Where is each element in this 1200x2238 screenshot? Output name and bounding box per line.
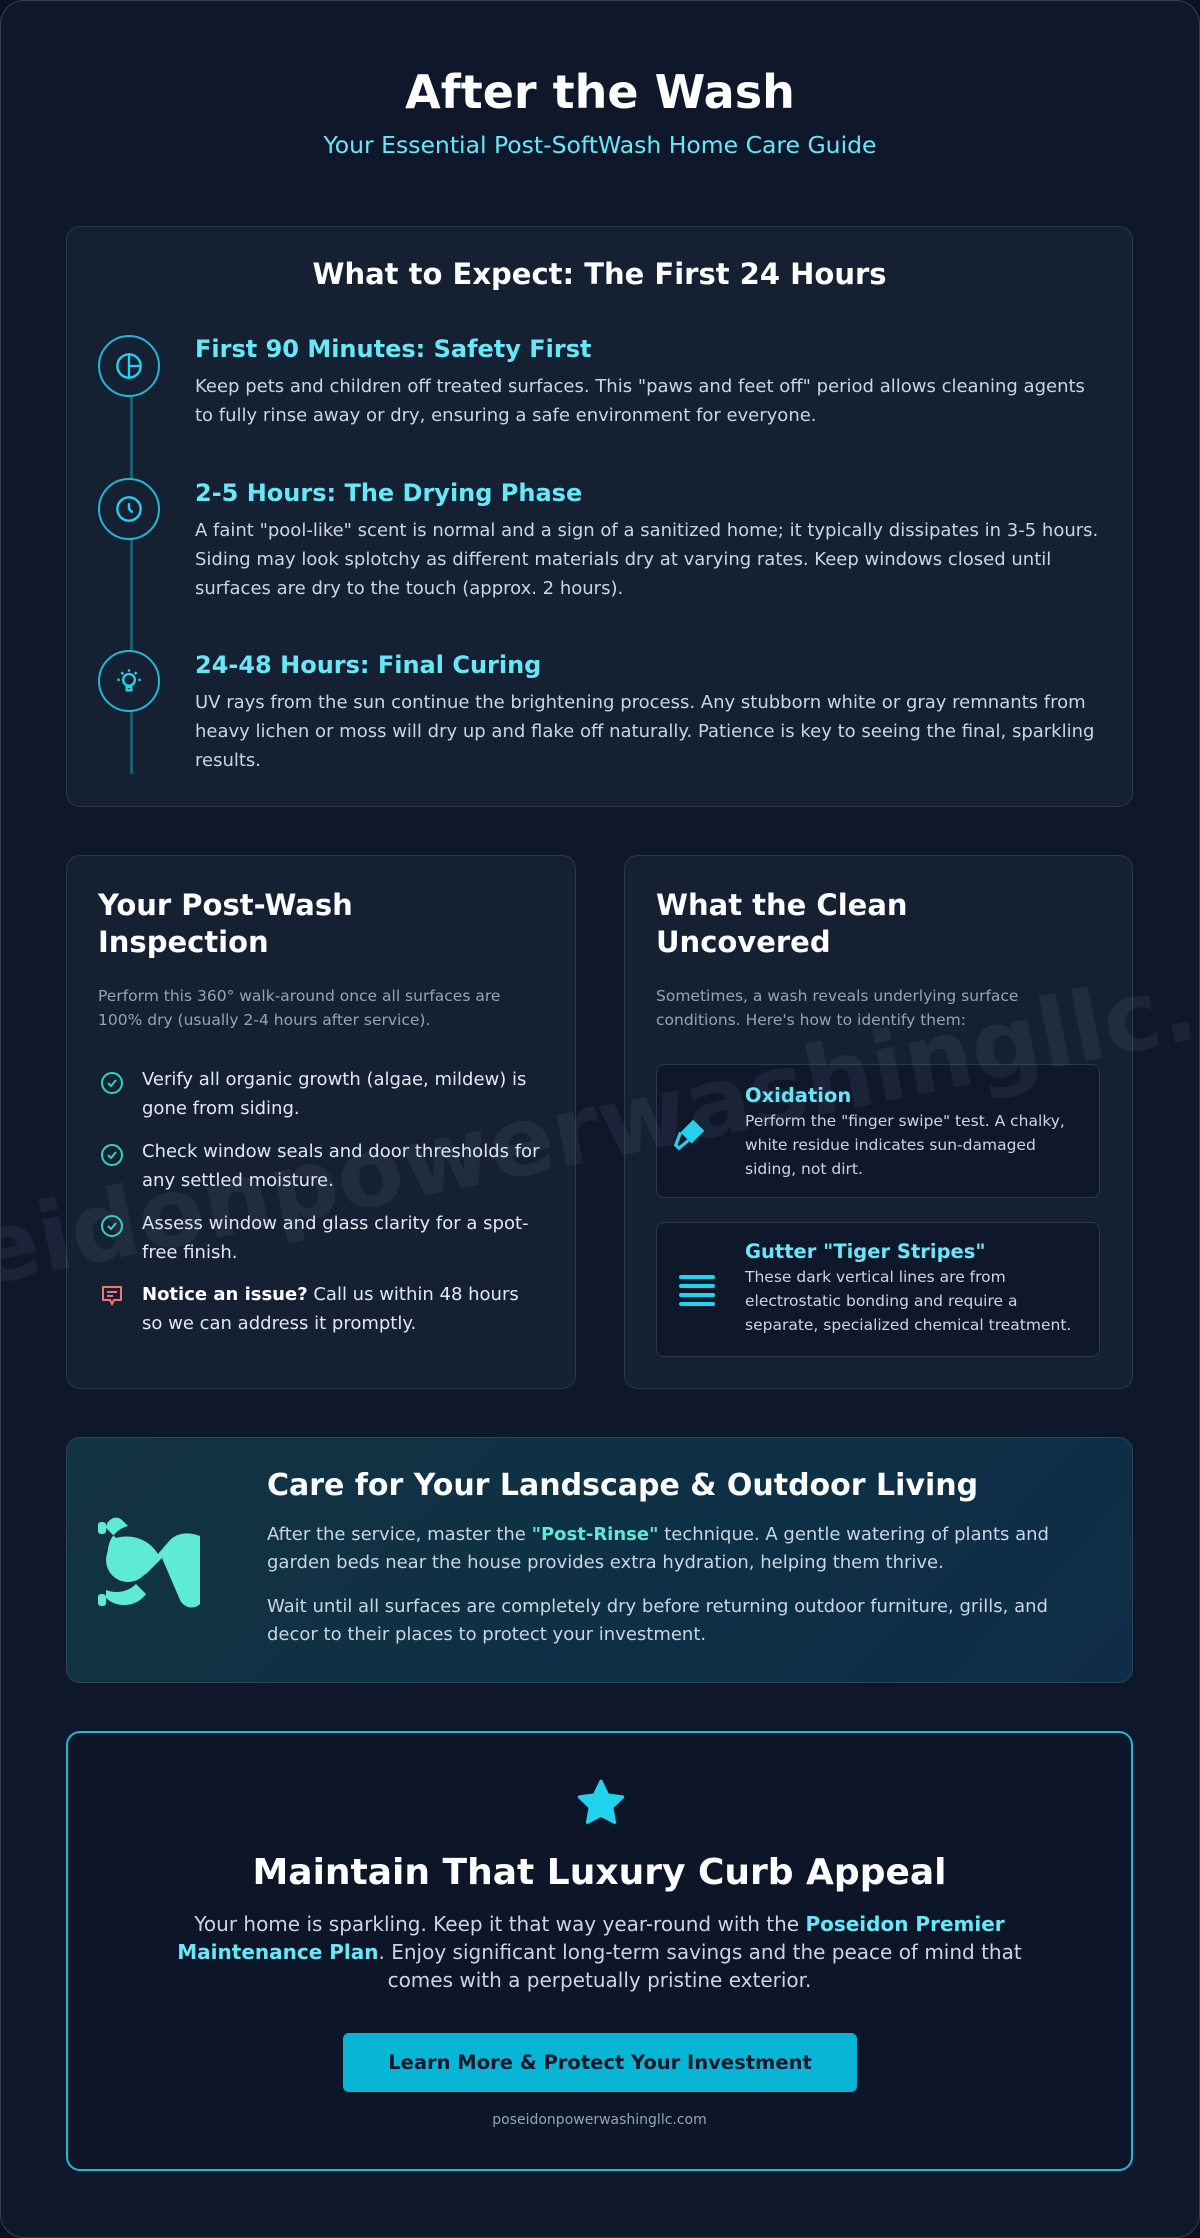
landscape text: Wait until all surfaces are completely dry before returning outdoor furniture, grills, and decor to their places to protect your investment. [267, 1596, 1048, 1645]
CTA text: Your home is sparkling. Keep it that way year-round with the Poseidon Premier Maintenance Plan. Enjoy significant long-term savings and the peace of mind that comes with a perpetually pristine exterior. [177, 1912, 1022, 1992]
timeline item 3: UV rays from the sun continue the brightening process. Any stubborn white or gray remnants from heavy lichen or moss will dry up and flake off naturally. Patience is key to seeing the final, sparkling results. [195, 692, 1094, 771]
heading: inspection: Inspection [98, 925, 269, 959]
tiger stripes text: These dark vertical lines are from electrostatic bonding and require a separate, specialized chemical treatment. [745, 1268, 1071, 1334]
list item 2: Check window seals and door thresholds for any settled moisture. [142, 1141, 539, 1191]
panel: clean uncovered [624, 855, 1133, 1389]
check 2 [101, 1144, 123, 1166]
URL: poseidonpowerwashingllc.com [492, 2112, 707, 2128]
check 1 [101, 1072, 123, 1094]
icon: watering can [98, 1518, 200, 1608]
timeline item 2: A faint "pool-like" scent is normal and a sign of a sanitized home; it typically dissipates in 3-5 hours. Siding may look splotchy as different materials dry at varying rates. Keep windows closed until surfaces are dry to the touch (approx. 2 hours). [195, 520, 1098, 599]
CTA button [343, 2033, 857, 2092]
timeline item 2 [195, 479, 1098, 599]
tiger stripes text: Gutter "Tiger Stripes" [745, 1240, 986, 1263]
card: tiger stripes [656, 1222, 1100, 1357]
CTA heading: Maintain That Luxury Curb Appeal [252, 1852, 947, 1893]
icon: star [578, 1780, 624, 1824]
timeline item 1: Keep pets and children off treated surfaces. This "paws and feet off" period allows cleaning agents to fully rinse away or dry, ensuring a safe environment for everyone. [195, 376, 1085, 426]
oxidation text: Perform the "finger swipe" test. A chalky, white residue indicates sun-damaged siding, not dirt. [745, 1112, 1065, 1178]
oxidation text: Oxidation [745, 1084, 851, 1107]
check 3 [101, 1215, 123, 1237]
list item 3: Assess window and glass clarity for a spot-free finish. [142, 1213, 529, 1263]
subtitle: Your Essential Post-SoftWash Home Care Guide [324, 131, 876, 159]
icon: message alert [102, 1286, 122, 1306]
landscape text: After the service, master the "Post-Rinse" technique. A gentle watering of plants and garden beds near the house provides extra hydration, helping them thrive. [267, 1524, 1049, 1573]
timeline line [130, 366, 133, 774]
CTA button: Learn More & Protect Your Investment [388, 2051, 812, 2074]
uncovered description: Sometimes, a wash reveals underlying surface conditions. Here's how to identify them: [656, 987, 1018, 1029]
timeline item 2: 2-5 Hours: The Drying Phase [195, 479, 582, 507]
icon: bulb [98, 650, 160, 712]
icon: brush [674, 1120, 704, 1150]
timeline item 3: 24-48 Hours: Final Curing [195, 651, 541, 679]
icon: pie [98, 335, 160, 397]
panel: first 24 hours [66, 226, 1133, 807]
heading: clean uncovered: What the Clean [656, 888, 908, 922]
landscape text [267, 1524, 1049, 1645]
inspection description: Perform this 360° walk-around once all surfaces are 100% dry (usually 2-4 hours after service). [98, 987, 500, 1029]
heading: inspection [98, 888, 353, 959]
heading: first 24 hours: What to Expect: The First 24 Hours [312, 257, 887, 291]
list item 4: Notice an issue? Call us within 48 hours so we can address it promptly. [142, 1284, 519, 1334]
timeline item 1: First 90 Minutes: Safety First [195, 335, 591, 363]
list item 1: Verify all organic growth (algae, mildew) is gone from siding. [142, 1069, 526, 1119]
timeline item 1 [195, 335, 1085, 426]
heading: clean uncovered: Uncovered [656, 925, 831, 959]
card: oxidation [656, 1064, 1100, 1198]
timeline item 3 [195, 651, 1094, 771]
panel: CTA [66, 1731, 1133, 2171]
heading: inspection: Your Post-Wash [98, 888, 353, 922]
panel: inspection [66, 855, 576, 1389]
panel: landscape [66, 1437, 1133, 1683]
icon: clock [98, 478, 160, 540]
icon: stripes [679, 1275, 715, 1306]
title: After the Wash [405, 65, 795, 119]
heading: clean uncovered [656, 888, 908, 959]
landscape heading: Care for Your Landscape & Outdoor Living [267, 1468, 978, 1503]
